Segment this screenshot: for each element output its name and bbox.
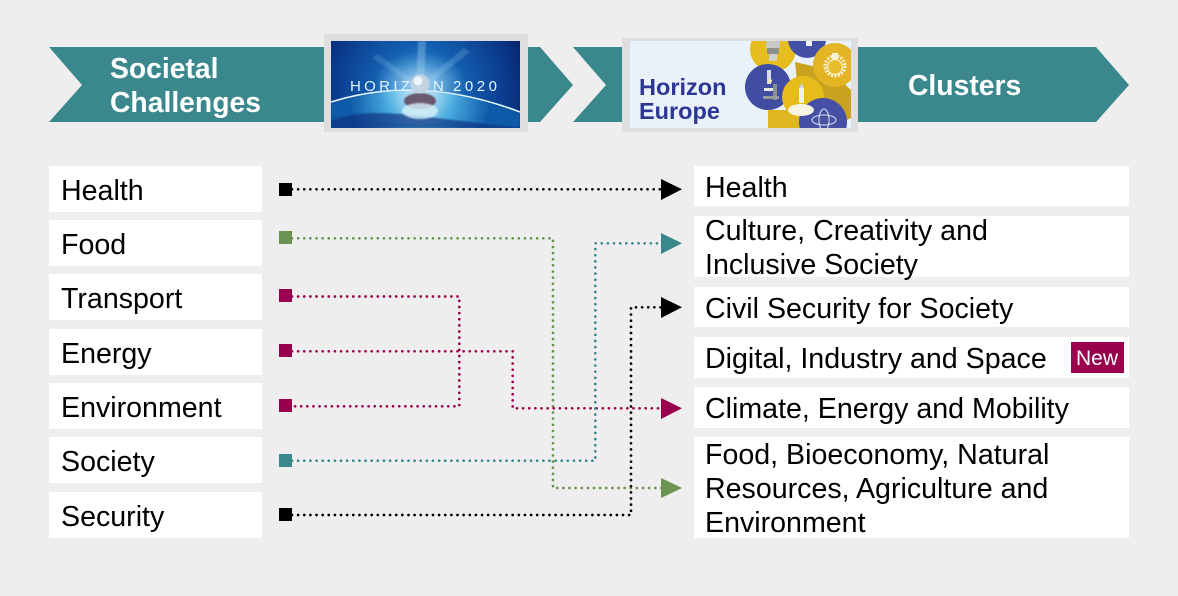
header banner: Societal Challenges (49, 47, 573, 122)
logo: Horizon Europe: Europe (639, 98, 720, 124)
header banner: Clusters: Clusters (908, 69, 1021, 101)
right list: clusters: Climate, Energy and Mobility (705, 393, 1070, 425)
right list: clusters: Civil Security for Society (705, 293, 1014, 325)
logo: Horizon 2020: HORIZ (350, 78, 410, 95)
left list: societal challenges: Environment (61, 392, 222, 424)
logo: Horizon 2020: N (433, 78, 444, 95)
left list: societal challenges: Health (61, 175, 144, 207)
right list: clusters: Environment (705, 507, 866, 539)
left list: societal challenges: Transport (61, 283, 182, 315)
header banner: Clusters (573, 47, 1129, 122)
right list: clusters: Culture, Creativity and (705, 215, 988, 247)
left list: societal challenges: Society (61, 446, 155, 478)
connector: Energy to Climate, Energy and Mobility (279, 344, 682, 419)
right list: clusters: Resources, Agriculture and (705, 473, 1048, 505)
connector: Society to Culture, Creativity and Inclusive Society (279, 233, 682, 467)
logo: Horizon Europe (622, 38, 858, 132)
right list: clusters: Food, Bioeconomy, Natural (705, 439, 1049, 471)
left list: societal challenges: Energy (61, 338, 152, 370)
connector: Health to Health (279, 179, 682, 200)
right list: clusters: Inclusive Society (705, 249, 919, 281)
connector: Security to Civil Security for Society (279, 297, 682, 521)
right list: clusters: Health (705, 172, 788, 204)
logo: Horizon 2020: 2020 (453, 78, 497, 95)
header banner: Societal Challenges: Challenges (110, 86, 261, 118)
logo: Horizon Europe: Horizon (639, 74, 726, 100)
connector: Food to Food cluster (279, 231, 682, 498)
logo: Horizon 2020 (324, 34, 528, 132)
connector: Transport and Environment merge into Energy line (279, 289, 459, 412)
left list: societal challenges (49, 166, 262, 538)
header banner: Societal Challenges: Societal (110, 52, 219, 84)
badge: New (1071, 342, 1124, 373)
right list: clusters: Digital, Industry and Space (705, 343, 1047, 375)
right list: clusters (694, 166, 1129, 539)
left list: societal challenges: Security (61, 501, 165, 533)
badge: New: New (1076, 347, 1119, 370)
left list: societal challenges: Food (61, 229, 126, 261)
